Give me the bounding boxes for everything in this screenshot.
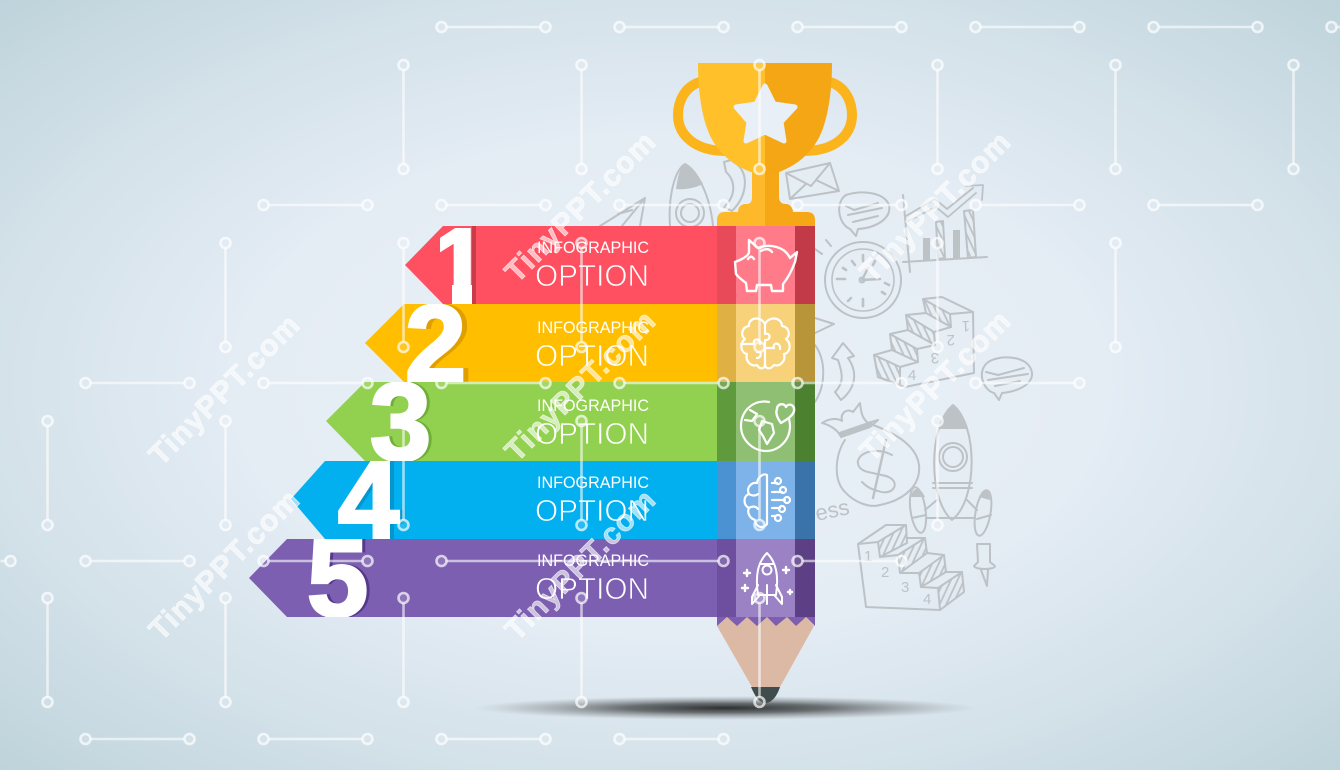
doodle: podium numerals lower: 2 [881,564,889,581]
arrow band [291,461,717,539]
option label [535,318,649,373]
doodle: podium numerals lower [864,548,931,608]
icon: piggy bank [735,240,797,291]
option label: OPTION [535,493,649,528]
doodle: telephone [724,160,745,211]
TinyPPT.com watermarks: TinyPPT.com [499,126,662,289]
doodle: podium numerals upper [908,317,970,384]
doodle: podium numerals lower: 1 [864,548,872,565]
doodle: podium stairs lower [858,525,964,610]
option label: OPTION [535,416,649,451]
number 3: 3 [370,361,431,484]
option label: INFOGRAPHIC [537,473,649,492]
doodle: curved arrow [832,343,854,400]
trophy cup right [765,63,832,176]
doodle: large rocket [907,405,994,537]
doodle: growth bar chart [903,185,987,272]
trophy base and stem right [765,170,815,226]
number 3 [370,382,432,461]
pencil wood tip [717,617,815,703]
option label [535,396,649,451]
option label [535,238,649,293]
option label: INFOGRAPHIC [537,551,649,570]
trophy cup left [698,63,765,176]
option 3 green band [326,382,815,461]
TinyPPT.com watermarks [143,126,1017,647]
TinyPPT.com watermarks: TinyPPT.com [499,305,662,468]
doodle: partial loop left of arrow [815,318,834,402]
number 2: 2 [410,283,471,406]
TinyPPT.com watermarks: TinyPPT.com [143,309,306,472]
option label: INFOGRAPHIC [537,238,649,257]
icon: globe with heart [741,402,794,451]
option label: INFOGRAPHIC [537,396,649,415]
pencil lead [751,687,780,703]
TinyPPT.com watermarks: TinyPPT.com [854,305,1017,468]
doodle: money bag [822,403,919,506]
option 4 blue band [291,461,815,539]
trophy handles [678,82,852,151]
number 1 [440,226,476,304]
wood cone [717,617,814,687]
number 5: 5 [307,517,368,640]
icon: rocket [742,553,792,604]
trophy [678,63,852,226]
doodle sketches behind pencil [600,160,1032,610]
arrow band [405,226,717,304]
number 1: 1 [429,206,490,329]
arrow band [365,304,717,382]
TinyPPT.com watermarks: TinyPPT.com [143,484,306,647]
doodle: podium numerals lower: 4 [923,591,931,608]
purple paper teeth [717,617,815,626]
number 4: 4 [338,439,399,562]
number 4: 4 [342,439,403,562]
pencil segments [717,461,815,539]
doodle: podium numerals upper: 3 [930,349,939,366]
number 4 [338,461,404,539]
option label: OPTION [535,258,649,293]
option label: INFOGRAPHIC [537,318,649,337]
doodle: podium numerals upper: 2 [946,331,955,348]
pencil segments [717,539,815,617]
option label [535,551,649,606]
arrow band [249,539,717,617]
doodle: speech bubble [839,192,889,236]
number 2: 2 [405,283,466,406]
TinyPPT.com watermarks: TinyPPT.com [854,126,1017,289]
ground shadow [473,696,977,720]
doodle: small rocket [670,164,713,227]
doodle: envelope [786,163,839,199]
doodle: podium numerals upper: 4 [908,367,916,384]
option 1 red band [405,226,815,304]
option 5 purple band [249,539,815,617]
option 2 yellow band [365,304,815,382]
doodle: push pin [974,544,995,586]
pencil segments [717,304,815,382]
pencil segments [717,226,815,304]
doodle: podium stairs upper [874,297,974,387]
number 2 [407,304,468,382]
arrow band [326,382,717,461]
TinyPPT.com watermarks: TinyPPT.com [499,484,662,647]
pencil segments [717,382,815,461]
number 3: 3 [373,361,434,484]
doodle: "ess" word: ess [813,494,852,526]
icon: half brain circuit [744,474,790,527]
option label [535,473,649,528]
doodle: podium numerals upper: 1 [961,317,970,334]
doodle: small speech bubble [982,357,1032,400]
doodle: podium numerals lower: 3 [901,579,909,596]
trophy star [736,86,795,141]
option label: OPTION [535,338,649,373]
doodle: paper plane [600,198,645,226]
icon: puzzle brain [741,318,790,368]
number 5 [308,539,370,617]
trophy base and stem left [717,170,765,226]
number 5: 5 [310,517,371,640]
doodle: clock [815,240,901,318]
option label: OPTION [535,571,649,606]
